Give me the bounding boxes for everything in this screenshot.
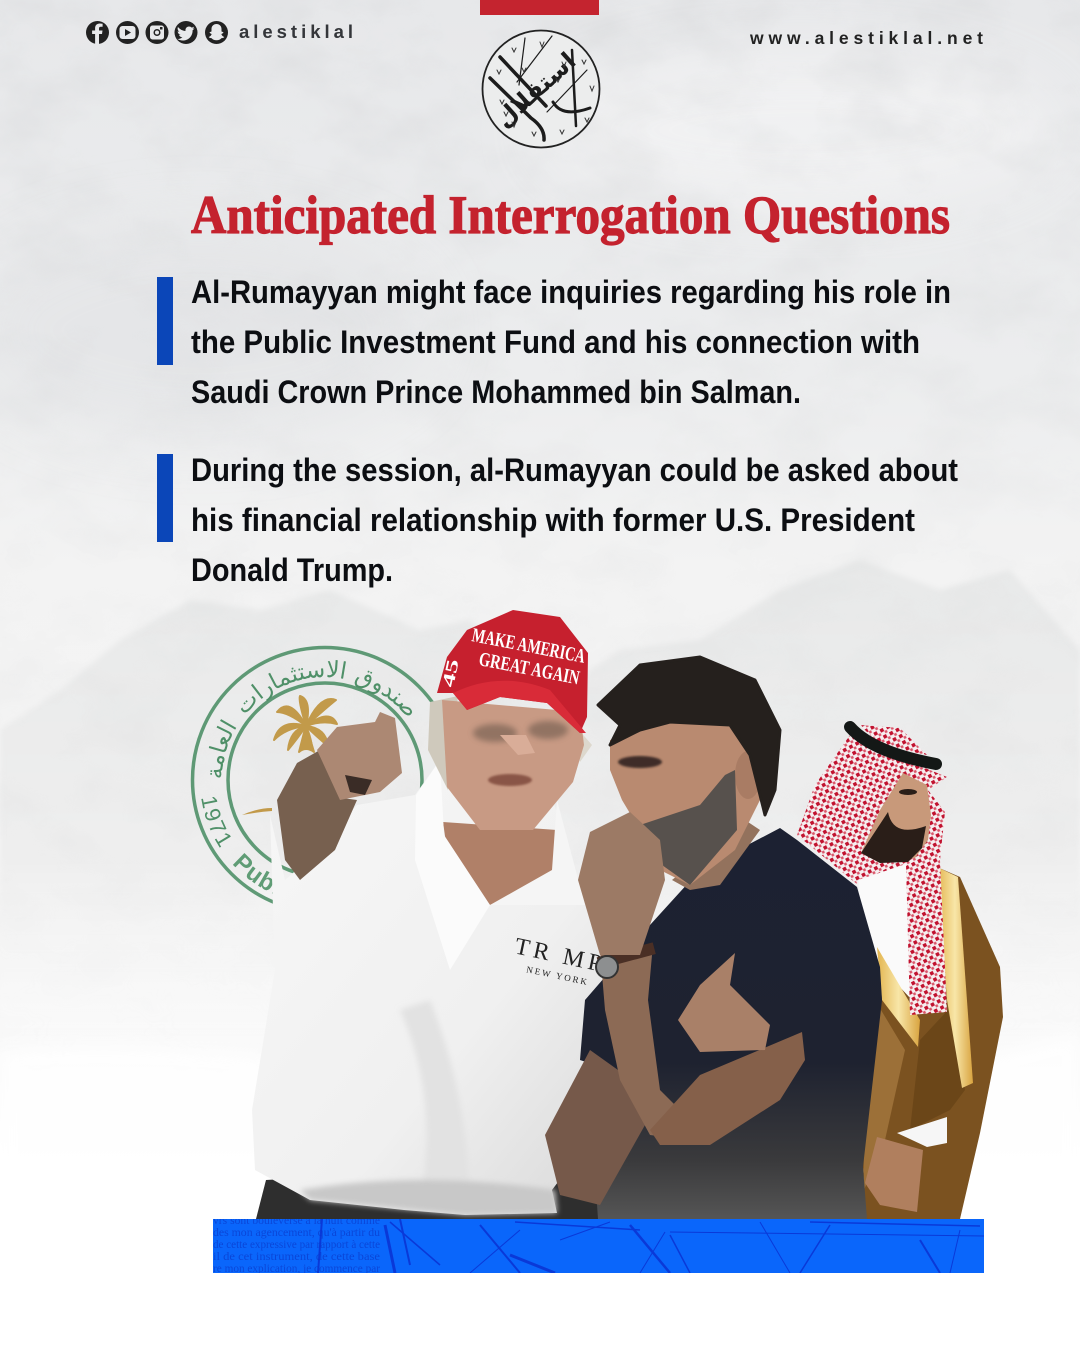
- paragraph: Saudi Crown Prince Mohammed bin Salman.: [191, 374, 801, 410]
- emblem: Public Investment Fund seal: الاستثمارات: [240, 660, 346, 712]
- beard: [861, 812, 926, 863]
- icon: facebook: [86, 21, 109, 44]
- paragraph: [191, 452, 958, 588]
- grey beard: [640, 770, 737, 885]
- dark trousers: [256, 1180, 598, 1219]
- brown cloak: [862, 867, 1003, 1219]
- faded newspaper text: de cette expressive par rapport à cette: [213, 1237, 380, 1251]
- neck: [672, 820, 760, 890]
- top red tab: [480, 0, 599, 15]
- paragraph: Donald Trump.: [191, 552, 393, 588]
- paragraph: During the session, al-Rumayyan could be asked about: [191, 452, 958, 488]
- text block: first question: [157, 274, 951, 410]
- neck: [443, 822, 557, 905]
- hand at mouth: [578, 812, 665, 955]
- figure: Trump: [252, 610, 612, 1219]
- figure: al-Rumayyan: [545, 657, 882, 1219]
- icon: instagram: [146, 21, 168, 44]
- crossing forearm: [650, 1032, 805, 1145]
- hair: [598, 657, 780, 815]
- paragraph: the Public Investment Fund and his connection with: [191, 324, 920, 360]
- emblem: Public Investment Fund seal: Public: [233, 853, 272, 894]
- faded newspaper text: re mon explication, je commence par: [213, 1261, 380, 1275]
- face: [442, 700, 584, 830]
- emblem: Public Investment Fund seal: صندوق: [354, 670, 412, 716]
- cap text: 45: [438, 657, 463, 689]
- faded newspaper text: [213, 1219, 380, 1273]
- paragraph: his financial relationship with former U.S. President: [191, 502, 915, 538]
- logo: circular calligraphy seal: استقلال: [490, 47, 581, 133]
- faded newspaper text: il de cet instrument, de cette base: [213, 1249, 380, 1263]
- photo cut-out: three men: [252, 610, 1003, 1219]
- cap text: MAKE AMERICA: [470, 624, 588, 668]
- face: [610, 722, 765, 885]
- pointing hand: [317, 712, 402, 800]
- navy polo shirt: [580, 828, 882, 1219]
- raised arm: [277, 750, 357, 880]
- cap text: GREAT AGAIN: [477, 648, 582, 689]
- hand: [865, 1137, 923, 1212]
- faded newspaper text: des mon agencement, qu'à partir du: [213, 1225, 380, 1239]
- red checked headdress: [797, 735, 947, 1015]
- icon: gold palm: [274, 696, 337, 752]
- gold trim: [937, 867, 973, 1088]
- blue marker bar: [157, 454, 173, 542]
- collar: [419, 822, 490, 969]
- hair: [428, 696, 458, 790]
- icon: snapchat: [205, 21, 228, 44]
- emblem: Public Investment Fund seal: 1971: [201, 797, 231, 848]
- watch: [596, 942, 656, 978]
- paragraph: [191, 274, 951, 410]
- icon: youtube: [116, 21, 139, 44]
- emblem: Public Investment Fund seal: العامة: [208, 719, 236, 778]
- logo text on shirt: TR MP: [512, 934, 604, 977]
- logo text on shirt: NEW YORK: [525, 964, 590, 987]
- faded newspaper text: vrs sont bouleversé à la nuit comme: [213, 1213, 380, 1227]
- ear: [735, 752, 758, 799]
- emblem: Public Investment Fund seal: [190, 646, 434, 904]
- black agal: [850, 727, 936, 764]
- lower hidden arm: [545, 1050, 645, 1205]
- hand on arm: [678, 953, 770, 1052]
- social icons row: [86, 21, 228, 44]
- text block: second question: [157, 452, 958, 588]
- white thobe: [858, 864, 910, 998]
- title: Anticipated Interrogation Questions: [191, 185, 950, 245]
- background: misty mountains: [0, 0, 1080, 1034]
- paragraph: Al-Rumayyan might face inquiries regarding his role in: [191, 274, 951, 310]
- brand handle: alestiklal: [239, 21, 353, 42]
- logo: circular calligraphy seal: [482, 30, 600, 148]
- white cuff: [897, 1117, 947, 1147]
- raised forearm: [600, 955, 674, 1136]
- website address: www.alestiklal.net: [749, 28, 983, 48]
- cap text: [444, 628, 584, 688]
- blue textured banner: [213, 1219, 984, 1273]
- white polo shirt: [252, 760, 612, 1215]
- red MAGA cap: [437, 610, 588, 733]
- face: [861, 773, 931, 863]
- icon: twitter: [174, 21, 198, 44]
- figure: Saudi Crown Prince: [797, 725, 1003, 1219]
- blue marker bar: [157, 277, 173, 365]
